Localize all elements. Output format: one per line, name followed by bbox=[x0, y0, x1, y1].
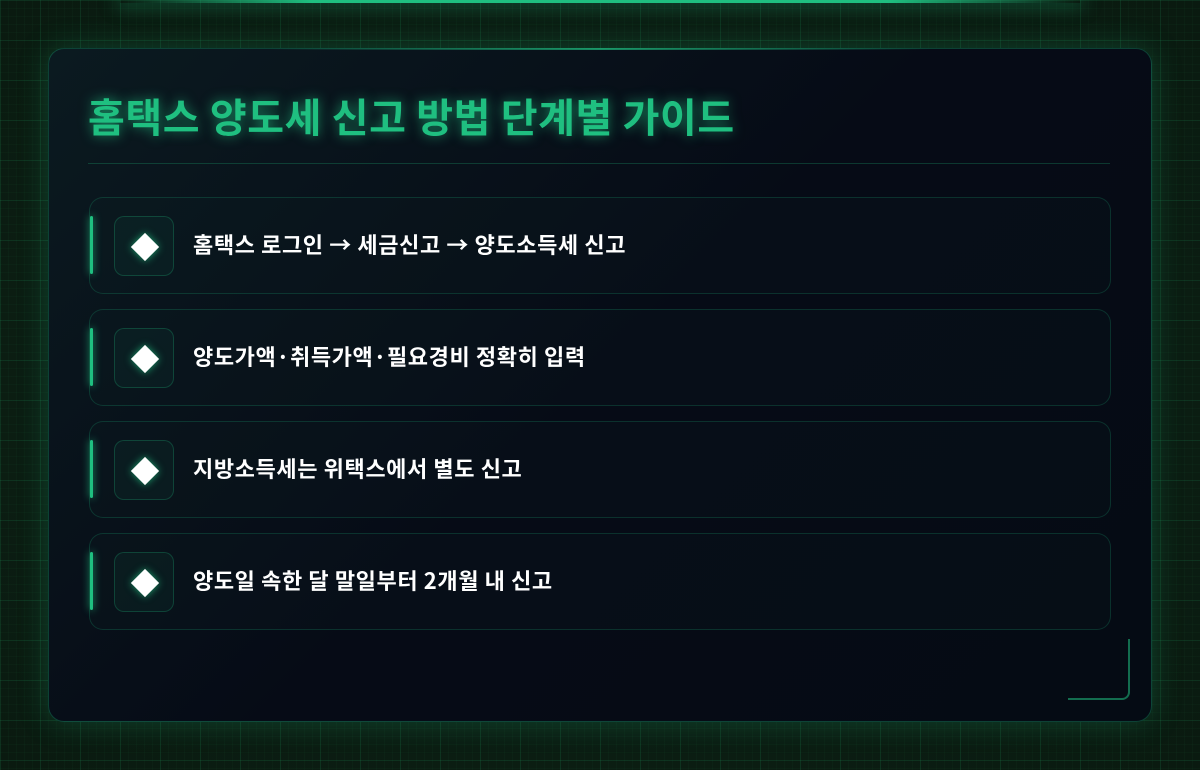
step 4 bbox=[89, 533, 1111, 630]
text: step 4: 양도일 속한 달 말일부터 2개월 내 신고 bbox=[193, 564, 553, 596]
icon: diamond bbox=[114, 216, 174, 276]
icon: diamond bbox=[114, 440, 174, 500]
title: 홈택스 양도세 신고 방법 단계별 가이드 bbox=[88, 86, 735, 144]
icon: diamond bbox=[114, 552, 174, 612]
step 2 bbox=[89, 309, 1111, 406]
text: step 3: 지방소득세는 위택스에서 별도 신고 bbox=[193, 452, 522, 484]
text: step 2: 양도가액·취득가액·필요경비 정확히 입력 bbox=[193, 340, 586, 372]
text: step 1: 홈택스 로그인 → 세금신고 → 양도소득세 신고 bbox=[193, 228, 626, 260]
step 1 bbox=[89, 197, 1111, 294]
corner bracket decoration bbox=[1068, 639, 1130, 700]
icon: diamond bbox=[114, 328, 174, 388]
step 3 bbox=[89, 421, 1111, 518]
